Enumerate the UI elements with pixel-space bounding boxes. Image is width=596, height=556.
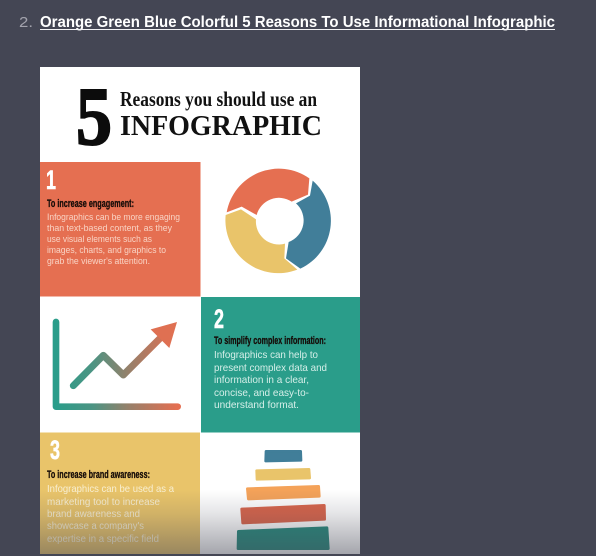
pyramid layer 1 [266, 451, 301, 461]
blue segment [286, 181, 331, 269]
yellow segment [225, 209, 297, 273]
bottom fade overlay [0, 490, 596, 556]
list number: 2. [19, 14, 33, 31]
reason 1 body: use visual elements such as [47, 234, 152, 245]
reason 2 body: present complex data and [214, 362, 327, 374]
reason 2 body: information in a clear, [214, 374, 309, 386]
title line 2: INFOGRAPHIC [120, 111, 322, 142]
panel: reason 1 [40, 162, 200, 296]
reason 3 heading: To increase brand awareness: [47, 469, 150, 481]
reason 1 body: than text-based content, as they [47, 223, 172, 234]
number 2: 2 [214, 304, 224, 334]
title line 1: Reasons you should use an [120, 87, 317, 111]
pyramid layer 3 [247, 486, 319, 499]
donut chart [225, 169, 331, 273]
reason 3 body: expertise in a specific field [47, 533, 159, 545]
number 3: 3 [50, 435, 60, 465]
panel: reason 3 [40, 432, 200, 554]
reason 3 body [47, 483, 174, 545]
reason 1 body: grab the viewer's attention. [47, 256, 150, 267]
reason 3 body: Infographics can be used as a [47, 483, 174, 495]
stacked pyramid icon [238, 451, 328, 549]
reason 2 body: understand format. [214, 399, 299, 411]
pyramid layer 4 [242, 505, 325, 523]
reason 3 body: marketing tool to increase [47, 496, 160, 508]
reason 1 body [47, 212, 180, 267]
reason 1 body: Infographics can be more engaging [47, 212, 180, 223]
number 1: 1 [46, 165, 56, 195]
reason 2 body: concise, and easy-to- [214, 387, 309, 399]
line chart icon [56, 322, 178, 407]
reason 2 heading: To simplify complex information: [214, 335, 326, 347]
big number 5: 5 [76, 70, 112, 162]
orange segment [227, 169, 309, 215]
reason 3 body: showcase a company's [47, 520, 144, 532]
reason 2 body [214, 349, 327, 411]
rising line [73, 338, 161, 386]
pyramid layer 2 [257, 469, 310, 479]
pyramid layer 5 [238, 528, 328, 549]
title [76, 70, 322, 162]
axes [56, 322, 178, 407]
infographic card [40, 67, 360, 554]
reason 3 body: brand awareness and [47, 508, 140, 520]
reason 2 body: Infographics can help to [214, 349, 318, 361]
heading link: Orange Green Blue Colorful 5 Reasons To Use Informational Infographic [40, 14, 555, 31]
reason 1 heading: To increase engagement: [47, 198, 134, 210]
reason 1 body: images, charts, and graphics to [47, 245, 166, 256]
panel: reason 2 [201, 297, 360, 432]
arrow head [151, 322, 177, 348]
